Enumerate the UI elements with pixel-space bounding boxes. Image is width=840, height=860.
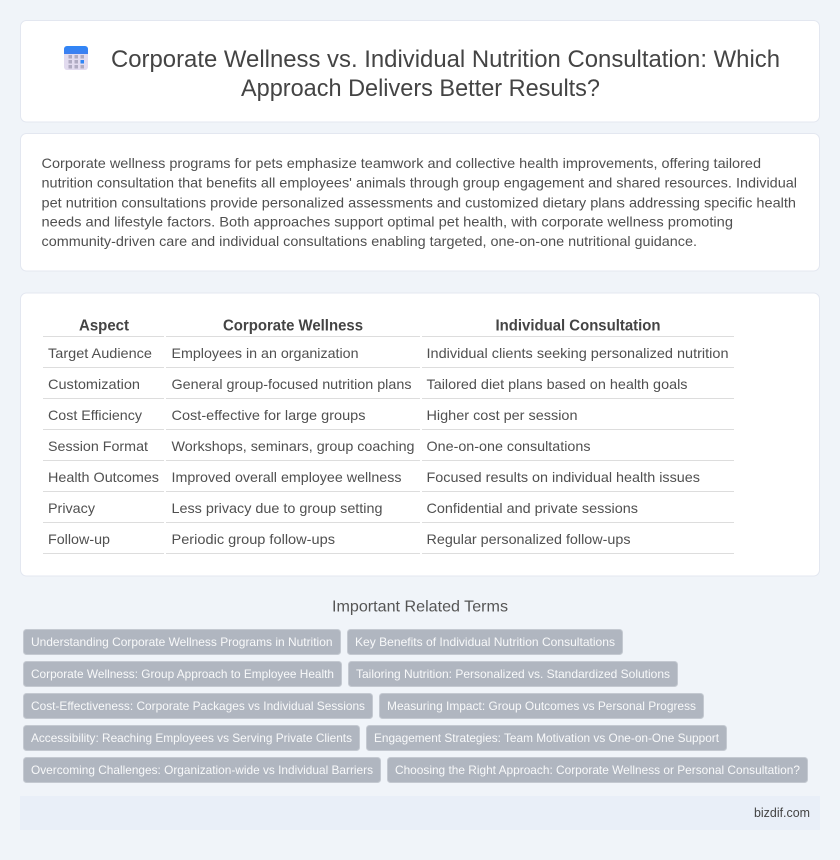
footer: bizdif.com xyxy=(754,805,810,820)
row: target audience: Individual clients seeking personalized nutrition xyxy=(426,345,728,361)
table header: Individual Consultation xyxy=(496,318,660,334)
chip: Engagement Strategies: Team Motivation vs One-on-One Support xyxy=(374,731,720,745)
title: Approach Delivers Better Results? xyxy=(241,75,600,102)
table header xyxy=(79,318,660,334)
chip xyxy=(388,758,808,782)
row: cost efficiency: Higher cost per session xyxy=(426,407,578,423)
chip xyxy=(24,694,372,718)
chip: Choosing the Right Approach: Corporate Wellness or Personal Consultation? xyxy=(395,763,800,777)
table header: Corporate Wellness xyxy=(223,318,363,334)
row: health outcomes: Health Outcomes xyxy=(48,469,159,485)
footer xyxy=(20,796,820,830)
row: health outcomes: Focused results on individual health issues xyxy=(426,469,700,485)
row: follow-up: Follow-up xyxy=(48,531,110,547)
row: follow-up: Regular personalized follow-ups xyxy=(426,531,630,547)
chip xyxy=(380,694,704,718)
panel: title card xyxy=(20,20,820,122)
chip xyxy=(348,630,622,654)
row: privacy: Less privacy due to group setting xyxy=(172,500,382,516)
row: session format: Workshops, seminars, group coaching xyxy=(172,438,414,454)
chip: Measuring Impact: Group Outcomes vs Personal Progress xyxy=(387,699,696,713)
panel: comparison table xyxy=(20,293,820,576)
chip: Tailoring Nutrition: Personalized vs. Standardized Solutions xyxy=(356,667,670,681)
chip: Overcoming Challenges: Organization-wide vs Individual Barriers xyxy=(31,763,373,777)
chip xyxy=(348,662,678,686)
row: target audience xyxy=(48,345,728,361)
row: privacy: Confidential and private sessions xyxy=(426,500,638,516)
heading: important related terms: Important Related Terms xyxy=(332,598,508,616)
title: Corporate Wellness vs. Individual Nutrition Consultation: Which xyxy=(111,46,780,73)
chip: Accessibility: Reaching Employees vs Serving Private Clients xyxy=(31,731,352,745)
table header: Aspect xyxy=(79,318,130,334)
title xyxy=(111,46,780,102)
icon: calendar xyxy=(64,46,88,70)
chip: Understanding Corporate Wellness Programs in Nutrition xyxy=(31,635,332,649)
row: customization: General group-focused nutrition plans xyxy=(172,376,412,392)
related terms chips xyxy=(24,630,808,782)
text block: introduction paragraph: community-driven care and individual consultations enabling targeted, one-on-one nutritional guidance. xyxy=(42,233,697,249)
row: health outcomes xyxy=(48,469,700,485)
text block: introduction paragraph: needs and lifestyle factors. Both approaches support optimal pet health, with corporate wellness promoting xyxy=(42,214,733,230)
row: customization: Tailored diet plans based on health goals xyxy=(426,376,688,392)
chip: Key Benefits of Individual Nutrition Consultations xyxy=(355,635,615,649)
row: follow-up: Periodic group follow-ups xyxy=(172,531,335,547)
panel: introduction xyxy=(20,134,820,271)
row: session format: One-on-one consultations xyxy=(426,438,590,454)
row: follow-up xyxy=(48,531,630,547)
text block: introduction paragraph: pet nutrition consultations provide personalized assessments and customized dietary plans addressing specific health xyxy=(42,194,796,210)
row: session format: Session Format xyxy=(48,438,148,454)
row: health outcomes: Improved overall employee wellness xyxy=(172,469,402,485)
row: customization xyxy=(48,376,688,392)
row: privacy xyxy=(48,500,638,516)
row: privacy: Privacy xyxy=(48,500,95,516)
chip xyxy=(24,662,342,686)
text block: introduction paragraph xyxy=(42,155,797,249)
chip: Corporate Wellness: Group Approach to Employee Health xyxy=(31,667,334,681)
row: target audience: Target Audience xyxy=(48,345,152,361)
text block: introduction paragraph: nutrition consultation that benefits all employees' animals through group engagement and shared resources. Individual xyxy=(42,174,797,190)
chip xyxy=(366,726,726,750)
row: session format xyxy=(48,438,590,454)
text block: introduction paragraph: Corporate wellness programs for pets emphasize teamwork and collective health improvements, offering tailored xyxy=(42,155,761,171)
row: cost efficiency: Cost-effective for large groups xyxy=(172,407,366,423)
row: cost efficiency xyxy=(48,407,578,423)
chip: Cost-Effectiveness: Corporate Packages vs Individual Sessions xyxy=(31,699,365,713)
row: cost efficiency: Cost Efficiency xyxy=(48,407,142,423)
chip xyxy=(24,758,380,782)
chip xyxy=(24,726,360,750)
row: customization: Customization xyxy=(48,376,140,392)
row: target audience: Employees in an organization xyxy=(172,345,358,361)
chip xyxy=(24,630,340,654)
